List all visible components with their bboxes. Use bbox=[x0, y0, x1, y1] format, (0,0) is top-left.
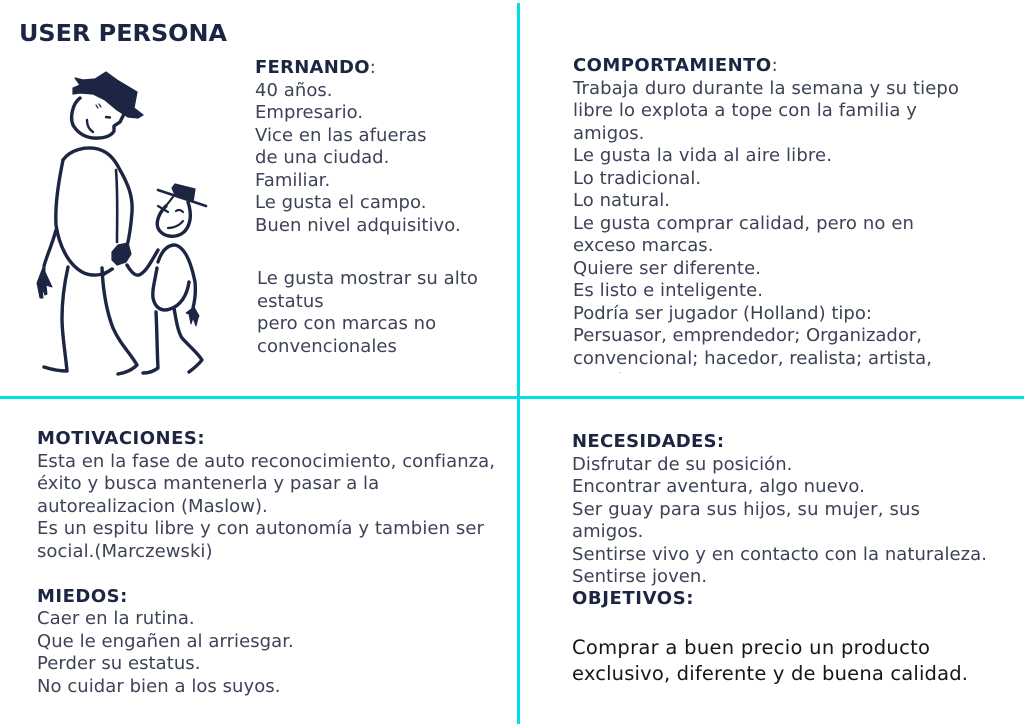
title: USER PERSONA bbox=[19, 21, 227, 47]
comportamiento text: amigos. bbox=[573, 123, 644, 144]
panel: necesidades y objetivos bbox=[572, 431, 987, 685]
miedos text: No cuidar bien a los suyos. bbox=[37, 676, 280, 697]
comportamiento text: Persuasor, emprendedor; Organizador, bbox=[573, 325, 922, 346]
Fernando status note: convencionales bbox=[257, 336, 397, 357]
comportamiento text: Trabaja duro durante la semana y su tiepo bbox=[572, 78, 959, 99]
necesidades text: Disfrutar de su posición. bbox=[572, 454, 792, 475]
comportamiento text: Le gusta comprar calidad, pero no en bbox=[573, 213, 914, 234]
motivaciones text: autorealizacion (Maslow). bbox=[37, 496, 268, 517]
miedos text bbox=[37, 608, 294, 697]
motivaciones heading: MOTIVACIONES: bbox=[37, 428, 205, 449]
panel: comportamiento bbox=[572, 55, 959, 369]
Fernando status note: Le gusta mostrar su alto bbox=[257, 268, 478, 289]
necesidades text: Ser guay para sus hijos, su mujer, sus bbox=[572, 499, 920, 520]
comportamiento text: Es listo e inteligente. bbox=[573, 280, 763, 301]
objetivos text: Comprar a buen precio un producto bbox=[572, 636, 930, 659]
comportamiento text: Quiere ser diferente. bbox=[573, 258, 761, 279]
comportamiento heading: COMPORTAMIENTO: bbox=[573, 55, 778, 76]
motivaciones text: éxito y busca mantenerla y pasar a la bbox=[37, 473, 379, 494]
motivaciones text: Es un espitu libre y con autonomía y tambien ser bbox=[37, 518, 485, 539]
Fernando details: Le gusta el campo. bbox=[255, 192, 427, 213]
objetivos heading: OBJETIVOS: bbox=[572, 588, 694, 609]
Fernando details: de una ciudad. bbox=[255, 147, 389, 168]
necesidades text bbox=[572, 454, 987, 587]
Fernando name: FERNANDO: bbox=[255, 57, 376, 78]
comportamiento text: libre lo explota a tope con la familia y bbox=[573, 100, 917, 121]
objetivos text bbox=[572, 636, 968, 685]
miedos heading: MIEDOS: bbox=[37, 586, 128, 607]
comportamiento text: convencional; hacedor, realista; artista, bbox=[573, 348, 932, 369]
necesidades text: Sentirse joven. bbox=[572, 566, 707, 587]
miedos text: Caer en la rutina. bbox=[37, 608, 195, 629]
miedos text: Que le engañen al arriesgar. bbox=[37, 631, 294, 652]
comportamiento text: Podría ser jugador (Holland) tipo: bbox=[573, 303, 872, 324]
Fernando status note: estatus bbox=[257, 291, 324, 312]
objetivos text: exclusivo, diferente y de buena calidad. bbox=[572, 662, 968, 685]
Fernando details: Empresario. bbox=[255, 102, 363, 123]
comportamiento text: Le gusta la vida al aire libre. bbox=[573, 145, 832, 166]
necesidades text: Sentirse vivo y en contacto con la naturaleza. bbox=[572, 544, 987, 565]
comportamiento text bbox=[572, 78, 959, 369]
illustration: father and son holding hands bbox=[37, 72, 206, 374]
miedos text: Perder su estatus. bbox=[37, 653, 201, 674]
panel: motivaciones y miedos bbox=[37, 428, 495, 697]
comportamiento text: Lo tradicional. bbox=[573, 168, 701, 189]
Fernando details bbox=[255, 80, 461, 236]
necesidades text: amigos. bbox=[572, 521, 643, 542]
necesidades heading: NECESIDADES: bbox=[572, 431, 724, 452]
panel: Fernando profile bbox=[255, 57, 478, 357]
motivaciones text bbox=[37, 451, 495, 562]
Fernando details: Buen nivel adquisitivo. bbox=[255, 215, 461, 236]
Fernando details: 40 años. bbox=[255, 80, 333, 101]
necesidades text: Encontrar aventura, algo nuevo. bbox=[572, 476, 865, 497]
Fernando status note: pero con marcas no bbox=[257, 313, 436, 334]
motivaciones text: Esta en la fase de auto reconocimiento, confianza, bbox=[37, 451, 495, 472]
motivaciones text: social.(Marczewski) bbox=[37, 541, 213, 562]
father bbox=[37, 72, 143, 374]
Fernando details: Vice en las afueras bbox=[255, 125, 427, 146]
comportamiento text: Lo natural. bbox=[573, 190, 670, 211]
son bbox=[127, 184, 206, 373]
Fernando details: Familiar. bbox=[255, 170, 330, 191]
Fernando status note bbox=[257, 268, 478, 357]
comportamiento text: exceso marcas. bbox=[573, 235, 713, 256]
